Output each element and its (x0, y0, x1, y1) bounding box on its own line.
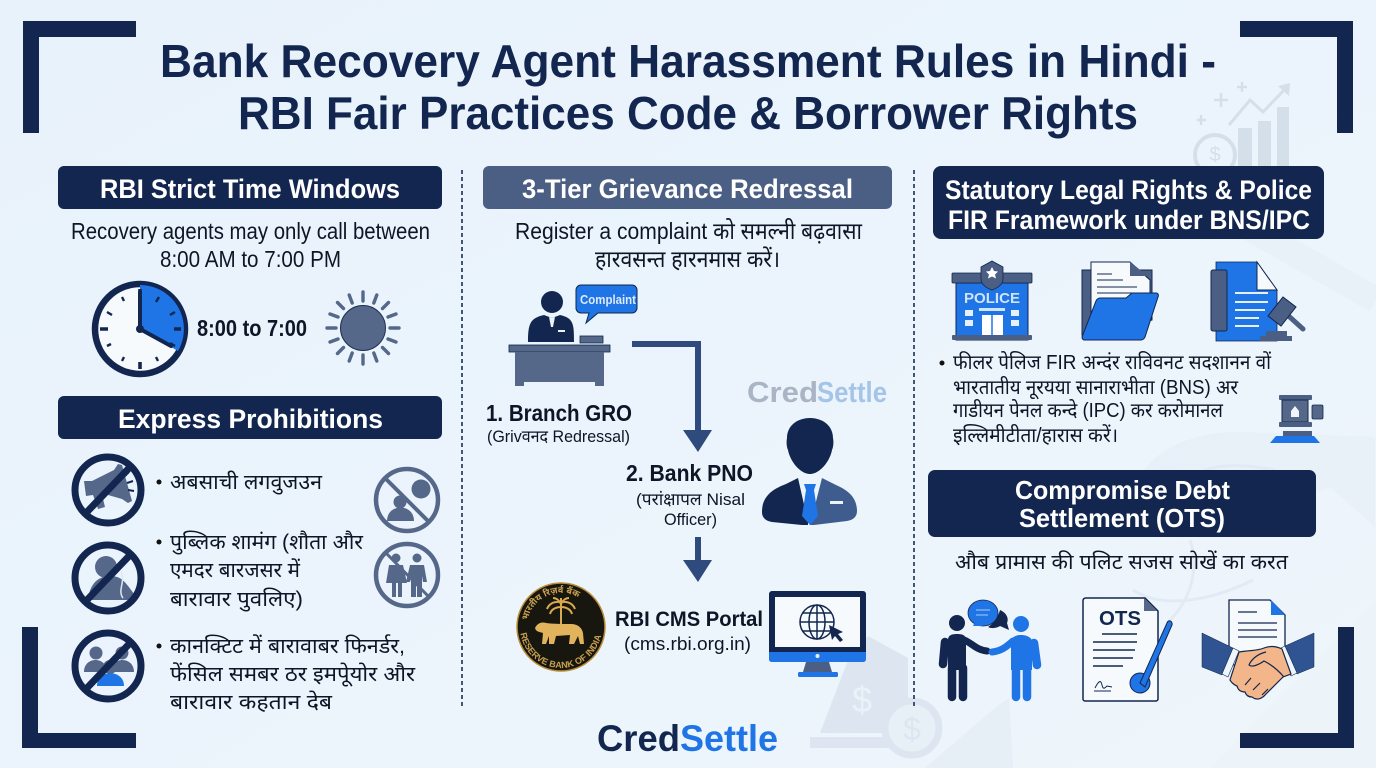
heading: Compromise Debt Settlement: Compromise Debt (1015, 475, 1230, 505)
icon: RBI seal: भारतीय रिज़र्व बैंक (522, 585, 580, 619)
icon: small courthouse gavel (1270, 395, 1323, 443)
heading: Statutory Legal Rights: FIR Framework under BNS/IPC (948, 205, 1310, 235)
icon: no group contact (75, 633, 141, 699)
panel: grievance redressal (483, 166, 892, 677)
text: prohibition 2: एमदर बारजसर में (170, 558, 300, 582)
title (160, 35, 1216, 139)
heading: Statutory Legal Rights: Statutory Legal Rights & Police (945, 175, 1312, 205)
watermark logo: Settle (817, 377, 887, 409)
label: Bank PNO: Officer) (664, 510, 717, 529)
icon: clock (95, 284, 185, 374)
column dividers (462, 170, 914, 708)
icon: RBI seal: RESERVE BANK OF INDIA (520, 632, 602, 668)
icon: legal document and gavel (1211, 262, 1303, 341)
text: prohibition 3: बारावार कहतान देब (170, 690, 333, 714)
icon: two people talking (943, 600, 1037, 697)
heading: RBI Strict Time Windows: RBI Strict Time Windows (100, 174, 400, 204)
text: prohibition 3: फेंसिल समबर ठर इमपूेयोर और (170, 662, 415, 687)
label: Branch GRO (486, 400, 632, 446)
text: register a complaint (515, 218, 863, 272)
logo: CredSettle: Cred (597, 718, 680, 759)
watermark: bank and coin: $ (903, 711, 921, 747)
text: FIR explanation: फीलर पेलिज FIR अन्दंर राविवनट सदशानन वों (953, 350, 1272, 374)
icon: RBI seal (516, 582, 606, 672)
watermark logo (747, 377, 887, 409)
heading: 3-Tier Grievance Redressal: 3-Tier Grievance Redressal (522, 174, 853, 204)
label: Branch GRO: 1. Branch GRO (486, 400, 632, 426)
text: prohibition 2: बारावार पुवलिए) (170, 587, 303, 612)
panel: legal rights (933, 166, 1324, 447)
label: Branch GRO: (Grivवनद Redressal) (487, 427, 630, 446)
heading: Express Prohibitions: Express Prohibitions (118, 404, 383, 434)
title: Bank Recovery Agent Harassment Rules in Hindi - (160, 35, 1216, 87)
text: FIR explanation: भारतातीय नूरयया सानाराभीता (BNS) अर (953, 375, 1239, 400)
text: OTS subtitle: औब प्रामास की पलिट सजस सोखें का करत (955, 550, 1289, 574)
label: RBI CMS Portal (615, 608, 763, 654)
icon: police station: POLICE (964, 290, 1020, 307)
label: RBI CMS Portal: RBI CMS Portal (615, 608, 763, 631)
text: call window: Recovery agents may only call between (71, 218, 430, 244)
text: register a complaint: हारवसन्त हारनमास करें। (595, 246, 780, 272)
label: RBI CMS Portal: (cms.rbi.org.in) (624, 634, 751, 654)
watermark: bank and coin (810, 636, 939, 755)
label: 8:00 to 7:00: 8:00 to 7:00 (197, 315, 307, 341)
title: RBI Fair Practices Code & Borrower Rights (238, 87, 1138, 139)
heading: RBI Strict Time Windows (58, 166, 442, 209)
icon: no family contact (376, 544, 438, 606)
label: Bank PNO: (परांक्षापल Nisal (636, 490, 745, 509)
icon: OTS document with pen (1083, 598, 1172, 701)
arrow: to RBI CMS (683, 537, 712, 582)
panel: time windows (58, 166, 442, 374)
panel: express prohibitions (58, 396, 442, 714)
label: Bank PNO: 2. Bank PNO (626, 460, 753, 486)
text: prohibition 2: पुब्लिक शामंग (शौता और (170, 530, 363, 555)
text: register a complaint: Register a complaint को समल्नी बढ़वासा (515, 218, 863, 244)
icon: handshake agreement (1202, 600, 1314, 699)
watermark: growth chart: $ (1209, 144, 1221, 166)
icon: no public shaming (376, 469, 438, 531)
text: prohibition 2 (156, 530, 363, 612)
watermark logo: Cred (747, 377, 818, 409)
icon: no abuse (75, 545, 141, 611)
logo: CredSettle: Settle (680, 718, 778, 759)
text: call window (71, 218, 430, 272)
heading: Express Prohibitions (58, 396, 442, 439)
heading: Compromise Debt Settlement (928, 470, 1316, 537)
icon: document folder (1082, 262, 1158, 340)
icon: complaint bubble: Complaint (580, 292, 637, 307)
text: call window: 8:00 AM to 7:00 PM (160, 246, 341, 272)
icon: sun (327, 292, 399, 364)
text: FIR explanation (940, 350, 1272, 447)
label: Bank PNO (626, 460, 753, 529)
heading: Compromise Debt Settlement: Settlement (OTS) (1019, 503, 1225, 533)
icon: complaint bubble (576, 285, 637, 323)
text: FIR explanation: इल्लिमीटीता/हारास करें। (953, 423, 1118, 447)
panel: debt settlement (928, 470, 1316, 701)
icon: OTS document with pen: OTS (1099, 608, 1141, 630)
watermark: ghost shapes right side (925, 200, 1376, 768)
icon: bank nodal officer (762, 418, 857, 525)
logo: CredSettle (597, 718, 778, 759)
icon: monitor with globe (769, 591, 866, 677)
watermark: bank and coin: $ (852, 679, 872, 720)
text: FIR explanation: गाडीयन पेनल कन्दे (IPC) कर करोमानल (953, 398, 1223, 422)
icon: branch officer at desk (509, 291, 610, 386)
arrow: to bank PNO (632, 341, 712, 452)
text: prohibition 3: कानक्टिट में बारावाबर फिनर्डर, (170, 634, 405, 658)
text: prohibition 1: अबसाची लगवुजउन (170, 470, 322, 495)
icon: police station (952, 261, 1032, 340)
text: prohibition 3 (156, 634, 415, 714)
heading: 3-Tier Grievance Redressal (483, 166, 892, 209)
icon: no megaphone (75, 457, 141, 523)
watermark: growth chart (1195, 82, 1290, 175)
heading: Statutory Legal Rights (933, 166, 1324, 239)
